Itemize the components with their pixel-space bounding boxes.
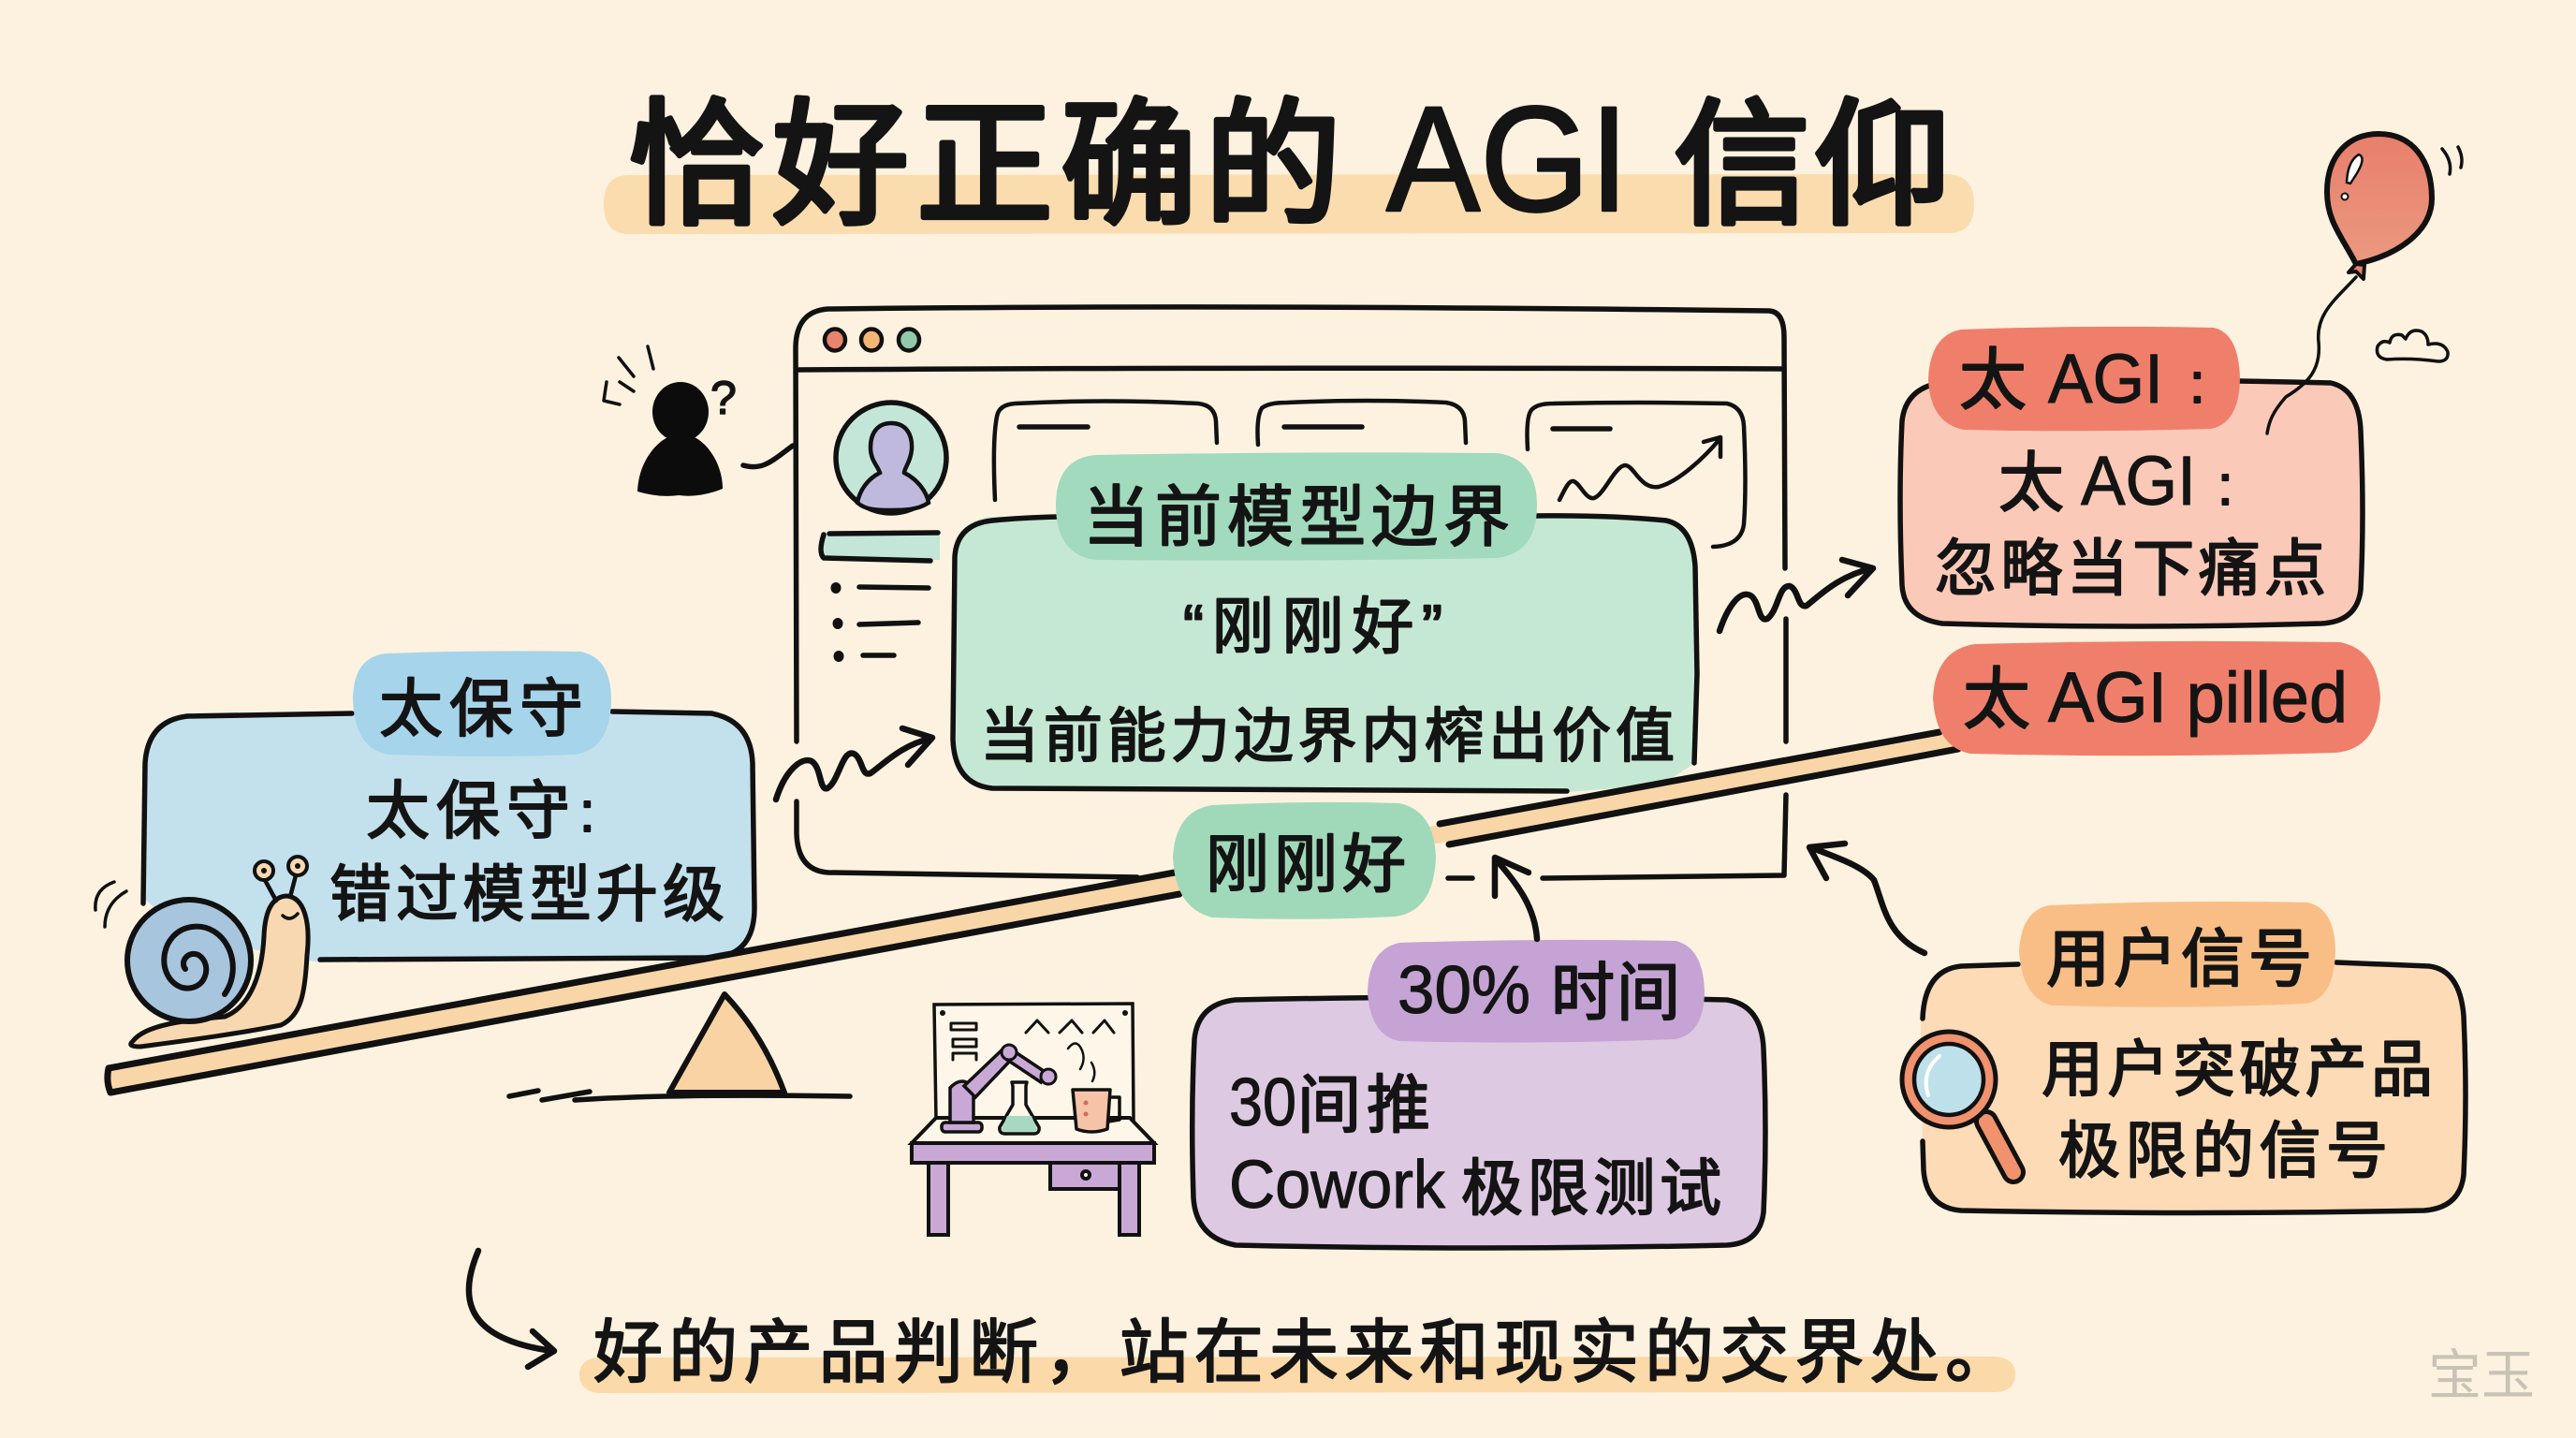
table top — [912, 1118, 1154, 1143]
panel fill and outline — [1900, 380, 2363, 626]
sidebar list — [831, 582, 929, 662]
panel outline — [143, 712, 754, 960]
panel label — [1368, 940, 1705, 1043]
panel: 30 percent time — [1193, 940, 1765, 1248]
body text line 1 — [1229, 1065, 1430, 1141]
panel: too AGI — [1900, 327, 2363, 626]
panel fill — [953, 514, 1695, 792]
beam edges — [108, 732, 1958, 1093]
just right label — [1173, 802, 1436, 919]
whiteboard — [934, 1004, 1134, 1120]
confused person icon: ? — [710, 372, 737, 424]
panel fill and outline — [1193, 997, 1765, 1248]
browser window — [796, 307, 1786, 878]
panel fill — [144, 712, 754, 962]
panel outline — [1923, 962, 2466, 1213]
mug and steam — [1068, 1043, 1120, 1132]
flask liquid — [1002, 1116, 1037, 1132]
title text — [628, 75, 1951, 242]
label text: 刚刚好 — [1206, 829, 1406, 901]
panel label — [2019, 902, 2335, 1007]
arrow: model boundary to too AGI — [1720, 560, 1873, 631]
balloon body — [2327, 134, 2432, 264]
icon: magnifier — [1902, 1032, 2013, 1172]
arrow: user signal to window — [1809, 844, 1925, 953]
beam — [109, 733, 1956, 1093]
label text: 用户信号 — [2046, 924, 2312, 995]
title highlight — [604, 174, 1974, 234]
panel outline — [953, 516, 1697, 791]
conclusion arrow — [469, 1251, 554, 1367]
fulcrum — [669, 994, 784, 1093]
balloon highlight — [2347, 154, 2363, 183]
title text: 恰好正确的 — [628, 89, 1341, 242]
title text: AGI — [1386, 75, 1629, 242]
label text — [1959, 340, 2205, 418]
balloon knot — [2349, 264, 2364, 279]
body text line 1: 间推 — [1297, 1070, 1430, 1141]
flask — [1000, 1082, 1039, 1134]
panel fill — [1921, 961, 2466, 1214]
snail shell — [127, 900, 251, 1021]
table legs and drawer — [929, 1163, 1139, 1235]
body text line 2: 极限测试 — [1461, 1153, 1721, 1223]
label text: 太 — [1959, 344, 2027, 418]
balloon string — [2267, 277, 2356, 433]
panel: too conservative — [143, 651, 754, 962]
arrow: conservative to model boundary — [776, 728, 932, 800]
panel label — [1056, 452, 1537, 561]
body text line 1: 太保守 — [366, 776, 570, 847]
quote text: “刚刚好” — [1183, 592, 1442, 661]
window frame — [796, 307, 1786, 878]
title text: 信仰 — [1674, 89, 1951, 242]
watermark: 宝玉 — [2428, 1345, 2535, 1406]
body text line 1: : — [2217, 454, 2233, 517]
panel: user signal — [1902, 902, 2466, 1214]
body text line 1: 30 — [1229, 1065, 1296, 1140]
card 3 with trend line — [1528, 403, 1745, 547]
body text line 1 — [1998, 442, 2233, 520]
body text line 1: 用户突破产品 — [2042, 1034, 2433, 1104]
seesaw — [108, 732, 1958, 1100]
label text — [1398, 953, 1680, 1029]
panel label — [1928, 327, 2240, 431]
body text line 1: AGI — [2081, 442, 2196, 520]
label text: 时间 — [1551, 958, 1680, 1029]
body text line 1: : — [579, 781, 595, 844]
card 2 — [1258, 401, 1466, 445]
confused person icon — [604, 346, 793, 496]
label text: 太保守 — [379, 674, 583, 745]
card 1 — [994, 401, 1217, 500]
body text line 2: 极限的信号 — [2058, 1116, 2388, 1185]
label text: 30% — [1398, 953, 1530, 1028]
icon: snail — [95, 857, 308, 1047]
icon: balloon — [2267, 134, 2462, 433]
body text line 2: 错过模型升级 — [329, 859, 724, 929]
avatar — [836, 403, 946, 513]
ground line — [509, 1091, 850, 1100]
icon: cloud — [2377, 330, 2448, 361]
snail motion lines — [95, 882, 126, 927]
arrow: 30 percent time to just right — [1495, 858, 1537, 939]
body text line 2: 忽略当下痛点 — [1935, 534, 2326, 603]
sidebar pill — [821, 533, 940, 561]
label text: AGI — [2048, 340, 2163, 418]
title bar divider — [797, 368, 1784, 370]
bottom conclusion — [469, 1251, 2015, 1393]
body text line 1: 太 — [1998, 447, 2064, 520]
body text: 当前能力边界内榨出价值 — [980, 704, 1675, 770]
snail body — [131, 896, 308, 1047]
icon: lab desk — [912, 1004, 1154, 1235]
window dots — [825, 330, 919, 350]
balloon motion lines — [2442, 147, 2462, 174]
body text line 2 — [1229, 1148, 1721, 1223]
panel: current model boundary — [953, 452, 1697, 792]
too AGI pilled label — [1933, 641, 2380, 756]
snail antennae — [265, 875, 296, 901]
label text: AGI pilled — [2048, 658, 2348, 738]
panel label — [353, 651, 611, 756]
label text: 当前模型边界 — [1083, 481, 1510, 555]
conclusion text: 好的产品判断，站在未来和现实的交界处。 — [593, 1313, 2014, 1391]
robot arm — [942, 1045, 1056, 1132]
table front — [912, 1143, 1154, 1163]
conclusion highlight — [579, 1357, 2015, 1393]
label text: : — [2189, 352, 2205, 415]
body text line 2: Cowork — [1229, 1148, 1446, 1223]
label text: 太 — [1963, 663, 2030, 738]
title — [604, 75, 1974, 242]
